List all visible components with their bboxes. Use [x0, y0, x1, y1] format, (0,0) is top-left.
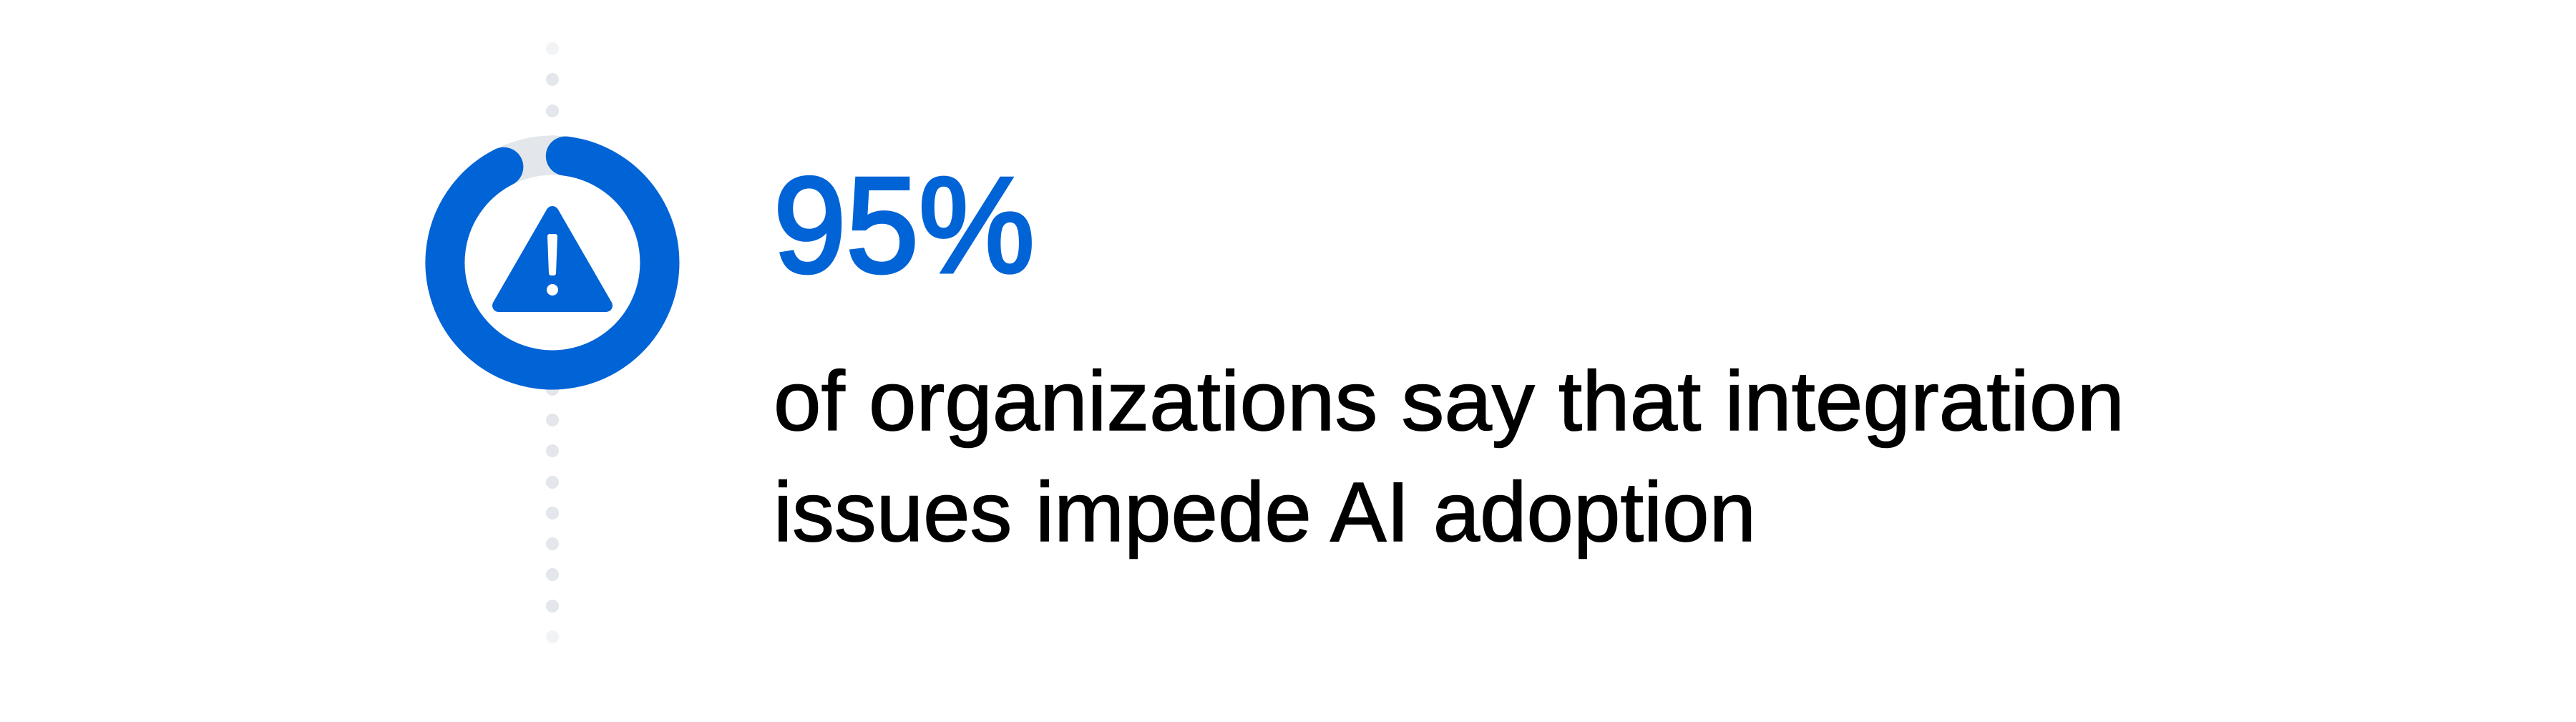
description text: of organizations say that integration	[774, 354, 2124, 449]
icon: progress ring with warning	[445, 155, 660, 370]
icon: warning triangle	[499, 213, 606, 306]
description text: issues impede AI adoption	[774, 465, 1756, 560]
dotted vertical timeline	[546, 42, 559, 643]
stat number: 95%	[774, 150, 1035, 301]
description text	[774, 354, 2124, 560]
